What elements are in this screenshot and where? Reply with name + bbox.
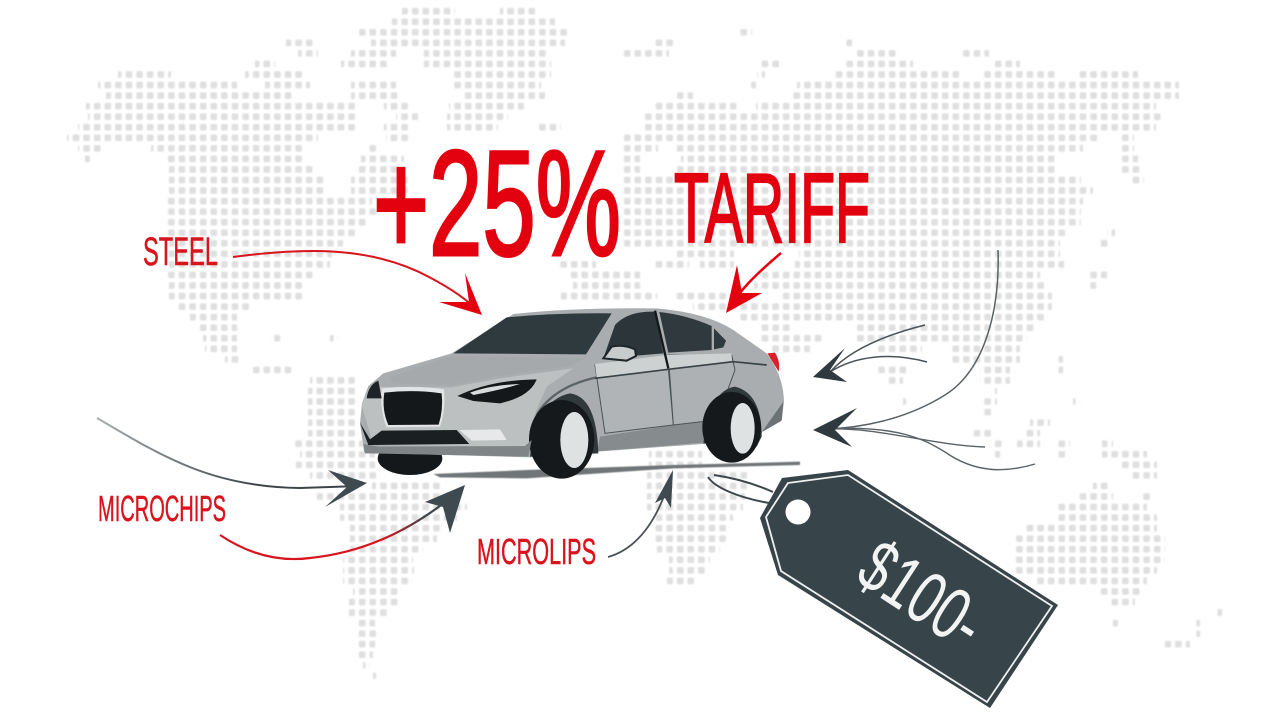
car: mirror <box>603 346 636 361</box>
car: fog lamp <box>459 429 507 441</box>
car: door panel <box>595 365 673 433</box>
car: tail light <box>767 353 779 372</box>
headline: TARIFF: TARIFF <box>674 153 870 263</box>
tag: body <box>760 470 1058 708</box>
arrow: upper right pair <box>813 325 927 382</box>
tag: inner outline <box>766 475 1052 702</box>
car <box>360 308 800 479</box>
car: fascia <box>362 368 573 447</box>
map: Europe and Asia <box>559 32 1179 475</box>
car: headlight <box>457 379 537 403</box>
car: front wheel <box>529 400 594 479</box>
arrow: microlips to car <box>608 470 673 557</box>
car: front side window <box>603 312 663 358</box>
map: North America <box>67 43 418 359</box>
price tag <box>708 470 1058 708</box>
car: lower door shading <box>597 421 718 451</box>
car: body <box>360 308 784 457</box>
car: rear wheel <box>702 392 761 463</box>
car: windshield <box>453 313 612 354</box>
car: front tyre low <box>378 442 442 475</box>
car: rear side window <box>659 312 712 353</box>
car: roof highlight strip <box>595 353 732 377</box>
car: quarter window <box>714 328 726 349</box>
label: MICROLIPS: MICROLIPS <box>477 531 596 572</box>
car: rear hub <box>731 403 755 454</box>
car: hood highlight <box>390 356 585 385</box>
car: belt line <box>595 362 767 378</box>
map: Africa <box>647 454 747 581</box>
car: left headlight <box>367 381 382 398</box>
car: wheel arch rear <box>703 387 762 447</box>
arrow: gray curve to car from left <box>97 418 367 507</box>
car: window pillar <box>655 311 668 368</box>
map: South America <box>253 370 467 676</box>
label: STEEL: STEEL <box>143 230 218 274</box>
car: rear door panel <box>668 355 735 425</box>
car: fender line <box>537 377 597 415</box>
headline: +25%: +25% <box>373 119 621 287</box>
tag: price: $100- <box>844 524 1000 665</box>
car: grille <box>384 391 442 425</box>
car: headlight highlight <box>470 384 520 395</box>
map: Greenland <box>341 11 567 127</box>
car: wheel arch front <box>530 393 598 457</box>
car: rear quarter shading <box>763 402 783 432</box>
label: MICROCHIPS: MICROCHIPS <box>98 488 226 529</box>
car: bumper <box>363 440 532 457</box>
map: Australia <box>1013 486 1222 644</box>
car: ground shadow <box>433 462 800 478</box>
arrow: lower right group <box>813 250 1035 470</box>
tag: hole <box>786 500 810 524</box>
arrow: red curve to car from microchips <box>220 485 465 559</box>
arrow: steel to car <box>233 251 482 315</box>
car: grille surround <box>381 387 444 427</box>
car: front hub <box>560 412 588 468</box>
arrow: tariff to car <box>726 253 781 313</box>
car: lower intake <box>360 423 469 445</box>
tag: string <box>708 475 773 503</box>
